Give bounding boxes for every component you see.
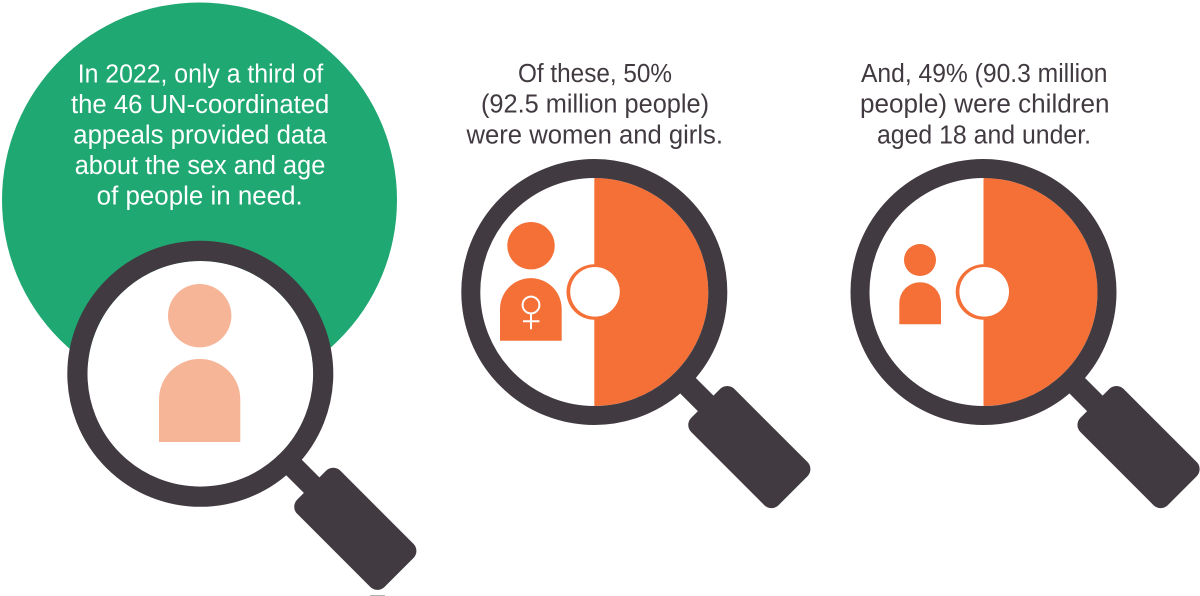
panel: a third of appeals: [2, 2, 421, 594]
text: children statement: [860, 60, 1110, 149]
text: appeals statement: In 2022, only a third of: [78, 61, 324, 89]
magnifying glass 2: [471, 168, 815, 512]
small grey mark at bottom edge: [370, 595, 385, 596]
text: children statement: people) were children: [860, 91, 1110, 119]
magnifying glass 1: [77, 251, 421, 594]
magnifying glass 3: [860, 168, 1200, 512]
text: women and girls statement: (92.5 million people): [481, 91, 709, 119]
icon: woman: [500, 222, 562, 341]
text: women and girls statement: were women and girls.: [465, 121, 723, 149]
text: appeals statement: of people in need.: [97, 182, 303, 210]
text: children statement: aged 18 and under.: [877, 121, 1091, 149]
icon: female symbol: [523, 297, 539, 329]
text: appeals statement: [71, 61, 329, 210]
green circle: [2, 2, 397, 398]
lens marker: 49 percent: [956, 264, 1011, 320]
icon: person: [159, 284, 240, 442]
panel: women and girls: [465, 60, 815, 512]
text: appeals statement: appeals provided data: [73, 122, 328, 150]
text: women and girls statement: [465, 60, 723, 149]
lens marker: 50 percent: [566, 264, 622, 320]
panel: children: [860, 60, 1200, 512]
text: children statement: And, 49% (90.3 million: [861, 60, 1108, 88]
text: appeals statement: the 46 UN-coordinated: [71, 91, 329, 119]
text: appeals statement: about the sex and age: [75, 152, 325, 180]
text: women and girls statement: Of these, 50%: [518, 60, 672, 88]
icon: child: [899, 244, 941, 324]
